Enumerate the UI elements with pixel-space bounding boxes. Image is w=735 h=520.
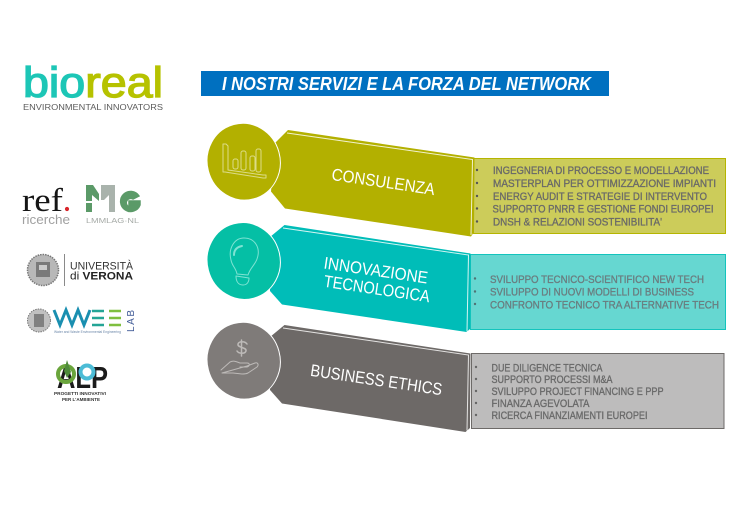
logo: bioreal: ENVIRONMENTAL INNOVATORS bbox=[23, 102, 163, 112]
details box: DUE DILIGENCE TECNICA bbox=[492, 362, 603, 374]
circle icon: bar chart bbox=[198, 115, 289, 208]
arrow banner: INNOVAZIONE bbox=[322, 253, 429, 288]
circle icon: hand with dollar bbox=[198, 314, 289, 407]
logo: ALP bbox=[54, 360, 108, 403]
details box: SVILUPPO PROJECT FINANCING E PPP bbox=[492, 386, 664, 398]
arrow banner bbox=[270, 225, 470, 332]
logo: WWEE Lab bbox=[28, 309, 137, 334]
details box: SVILUPPO DI NUOVI MODELLI DI BUSINESS bbox=[490, 286, 694, 298]
details box: RICERCA FINANZIAMENTI EUROPEI bbox=[492, 410, 648, 422]
logo: ref ricerche: ricerche bbox=[22, 212, 70, 227]
details box: INGEGNERIA DI PROCESSO E MODELLAZIONE bbox=[493, 165, 709, 177]
logo: ALP: ALP bbox=[57, 360, 108, 395]
details box: SVILUPPO TECNICO-SCIENTIFICO NEW TECH bbox=[490, 274, 704, 286]
arrow banner: CONSULENZA bbox=[330, 165, 437, 199]
details box bbox=[472, 354, 724, 428]
circle icon: light bulb bbox=[198, 214, 289, 308]
details box bbox=[470, 254, 726, 330]
arrow banner bbox=[271, 130, 474, 236]
arrow banner: BUSINESS ETHICS bbox=[309, 361, 443, 399]
logo: WWEE Lab: Water and Waste Environmental Engineering bbox=[54, 329, 121, 334]
logo: MG bbox=[86, 185, 140, 225]
details box: DNSH & RELAZIONI SOSTENIBILITA' bbox=[493, 216, 662, 228]
logo: ref ricerche: ref bbox=[22, 183, 63, 219]
panel: innovazione tecnologica bbox=[198, 214, 725, 332]
title: I NOSTRI SERVIZI E LA FORZA DEL NETWORK bbox=[222, 74, 593, 94]
panel: consulenza bbox=[198, 115, 725, 236]
details box: SUPPORTO PROCESSI M&A bbox=[492, 374, 613, 386]
logo: MG: LMMLAG·NL bbox=[86, 218, 139, 225]
details box: ENERGY AUDIT E STRATEGIE DI INTERVENTO bbox=[493, 191, 707, 203]
panel: business ethics bbox=[198, 314, 724, 432]
logo: ALP: PROGETTI INNOVATIVI bbox=[54, 391, 107, 397]
logo: WWEE Lab: LAB bbox=[126, 310, 137, 332]
details box bbox=[474, 158, 726, 234]
logo: ALP: PER L'AMBIENTE bbox=[62, 397, 101, 403]
details box: MASTERPLAN PER OTTIMIZZAZIONE IMPIANTI bbox=[493, 178, 716, 190]
logo: bioreal: bioreal bbox=[23, 59, 163, 107]
logo: Università di Verona bbox=[28, 254, 134, 286]
arrow banner: TECNOLOGICA bbox=[322, 272, 432, 306]
arrow banner bbox=[270, 325, 470, 432]
logo: Università di Verona: UNIVERSITÀ bbox=[70, 260, 134, 272]
logo: ref ricerche bbox=[22, 183, 70, 227]
details box: FINANZA AGEVOLATA bbox=[492, 398, 590, 410]
logo: Università di Verona: di VERONA bbox=[70, 270, 133, 282]
